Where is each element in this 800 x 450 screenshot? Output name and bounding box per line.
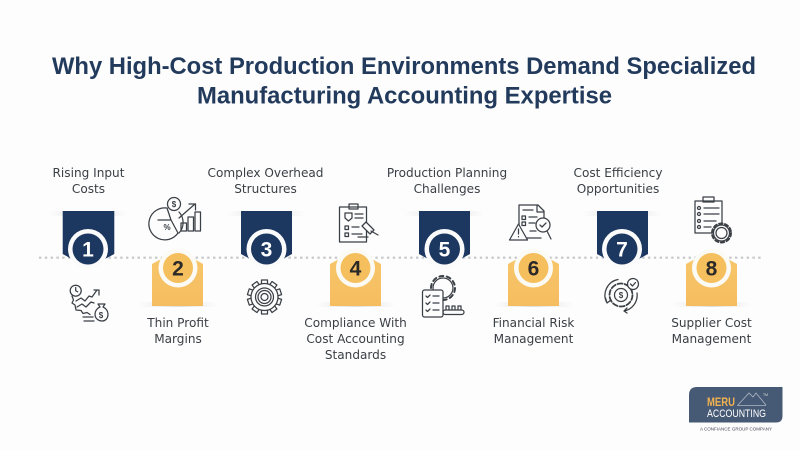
logo: Meru Accounting: MERU <box>707 395 735 409</box>
step 4 icon: clipboard with gavel <box>340 204 378 242</box>
step 1 label: Costs <box>72 182 105 196</box>
step 1: rising input costs <box>48 166 128 321</box>
step 2 icon: pie chart with dollar and bars <box>149 198 200 240</box>
step 2 label: Margins <box>154 332 202 346</box>
step 8 banner: 8 <box>706 258 718 280</box>
step 3: complex overhead structures <box>208 166 323 314</box>
step 2: thin profit margins <box>138 198 218 346</box>
step 4 banner <box>316 248 396 307</box>
step 4 label: Cost Accounting <box>306 332 405 346</box>
step 5 label: Challenges <box>414 182 480 196</box>
title: Manufacturing Accounting Expertise <box>197 84 612 110</box>
title <box>52 54 756 110</box>
step 5 label: Production Planning <box>387 166 507 180</box>
step 8 label: Management <box>672 332 752 346</box>
step 5 banner: 5 <box>439 238 451 262</box>
step 4 label: Compliance With <box>304 316 407 330</box>
icon: gear with dollar and check: $ <box>619 291 624 300</box>
step 3 label: Complex Overhead <box>208 166 323 180</box>
step 3 banner <box>226 211 306 269</box>
step 8 label: Supplier Cost <box>671 316 752 330</box>
step 7 label: Cost Efficiency <box>574 166 662 180</box>
step 1 label: Rising Input <box>53 166 125 180</box>
step 3 banner: 3 <box>261 238 272 262</box>
step 2 label: Thin Profit <box>146 316 209 330</box>
logo: Meru Accounting: A CONFIANCE GROUP COMPANY <box>700 426 773 432</box>
step 1 banner <box>48 211 128 269</box>
step 6 label: Management <box>494 332 574 346</box>
step 2 banner: 2 <box>172 258 184 280</box>
icon: gear with dollar and check <box>605 278 638 313</box>
step 2 banner <box>138 248 218 307</box>
step 6: financial risk <box>493 205 574 346</box>
step 2 icon: pie chart with dollar and bars: % <box>163 223 171 232</box>
icon: clock, gear, growth arrow and money bag <box>70 285 108 321</box>
icon: checklist with gear and conveyor <box>422 276 464 317</box>
step 5: production planning <box>387 166 507 317</box>
step 8 banner <box>672 248 752 307</box>
step 6 icon: report, warning triangle and magnifier <box>510 205 551 240</box>
step 6 label: Financial Risk <box>493 316 574 330</box>
step 7 banner <box>582 211 662 269</box>
step 7 label: Opportunities <box>577 182 659 196</box>
step 8: supplier cost <box>671 197 752 346</box>
logo: Meru Accounting <box>689 387 782 432</box>
step 6 banner <box>494 248 574 307</box>
dotted timeline <box>39 257 762 259</box>
logo: Meru Accounting: ACCOUNTING <box>707 408 766 420</box>
step 4 label: Standards <box>325 348 386 362</box>
logo: Meru Accounting: TM <box>763 393 768 397</box>
title: Why High-Cost Production Environments Demand Specialized <box>52 54 756 80</box>
icon: gear <box>247 280 282 314</box>
step 4: compliance <box>304 204 407 362</box>
step 5 banner <box>404 211 484 269</box>
step 6 banner: 6 <box>528 258 539 280</box>
step 8 icon: clipboard with gear <box>695 197 731 242</box>
step 1 banner: 1 <box>82 238 94 262</box>
step 3 label: Structures <box>234 182 297 196</box>
step 4 banner: 4 <box>350 258 362 280</box>
step 7: cost efficiency <box>574 166 662 313</box>
step 2 icon: pie chart with dollar and bars: $ <box>172 200 177 209</box>
step 7 banner: 7 <box>616 238 628 262</box>
icon: clock, gear, growth arrow and money bag: $ <box>99 311 104 320</box>
